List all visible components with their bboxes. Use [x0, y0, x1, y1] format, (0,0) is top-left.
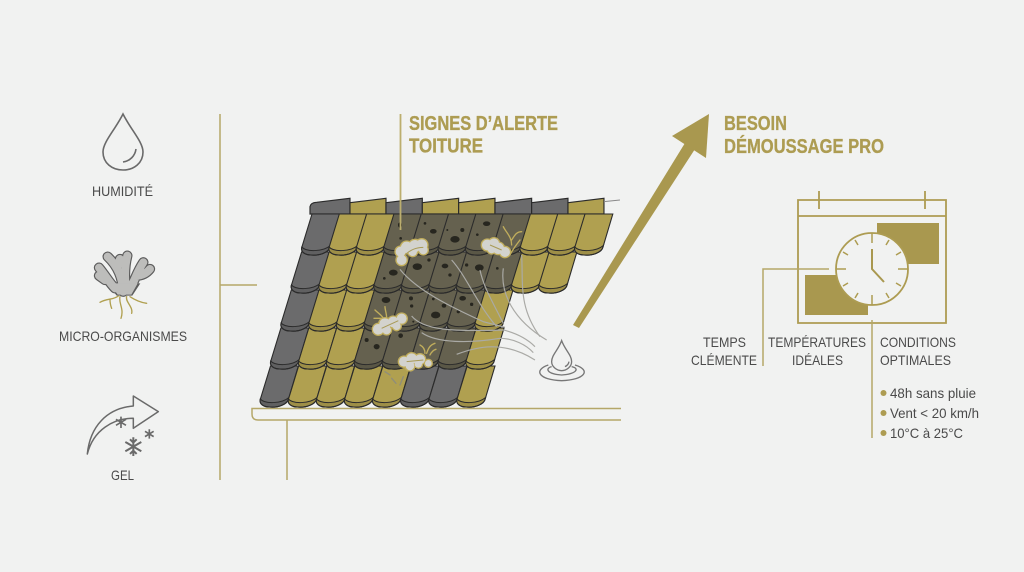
left divider line: [220, 114, 257, 480]
label: conditions optimales: OPTIMALES: [880, 352, 951, 368]
tile row 3: [281, 290, 513, 331]
title: signes d'alerte toiture: [409, 112, 558, 158]
label: conditions optimales: [880, 334, 956, 368]
icon: water drop: [103, 114, 143, 170]
gold blocks: [805, 223, 939, 315]
title: signes d'alerte toiture: SIGNES D’ALERTE: [409, 112, 558, 135]
roof illustration: [260, 198, 620, 407]
label: gel: GEL: [111, 467, 134, 483]
conditions list: 10°C à 25°C: [890, 425, 963, 441]
conditions list: 48h sans pluie: [890, 385, 976, 401]
label: températures idéales: TEMPÉRATURES: [768, 334, 866, 350]
label: temps clément: TEMPS: [703, 334, 746, 350]
tile row 1: [302, 214, 613, 255]
title: besoin démoussage pro: DÉMOUSSAGE PRO: [724, 135, 884, 158]
title: besoin démoussage pro: BESOIN: [724, 112, 787, 135]
label: temps clément: [691, 334, 757, 368]
icon: frost arrow: [87, 396, 158, 456]
icon: drop with ripples: [540, 341, 584, 381]
moss dots: [365, 221, 499, 349]
title: signes d'alerte toiture: TOITURE: [409, 134, 483, 158]
arrow rising: [573, 114, 709, 328]
conditions list: [880, 385, 979, 441]
ridge tiles: [310, 198, 620, 214]
callout lines: [763, 269, 872, 438]
tile row 4: [270, 328, 504, 369]
label: temps clément: CLÉMENTE: [691, 352, 757, 368]
leader line from title to roof: [400, 114, 402, 230]
label: conditions optimales: CONDITIONS: [880, 334, 956, 350]
clock: [836, 233, 908, 305]
calendar with clock: [763, 191, 946, 438]
label: températures idéales: [768, 334, 866, 368]
moss patches: [373, 227, 522, 385]
label: températures idéales: IDÉALES: [792, 352, 843, 368]
label: micro-organismes: MICRO-ORGANISMES: [59, 328, 187, 344]
title: besoin démoussage pro: [724, 112, 884, 158]
water wisps: [400, 255, 547, 360]
conditions list: Vent < 20 km/h: [890, 405, 979, 421]
calendar frame: [798, 191, 946, 323]
label: humidité: HUMIDITÉ: [92, 183, 153, 199]
tile row 2: [291, 252, 577, 293]
icon: lichen micro-organisms: [99, 256, 150, 318]
tile row 5: [260, 366, 495, 407]
gutter shelf: [252, 408, 621, 480]
